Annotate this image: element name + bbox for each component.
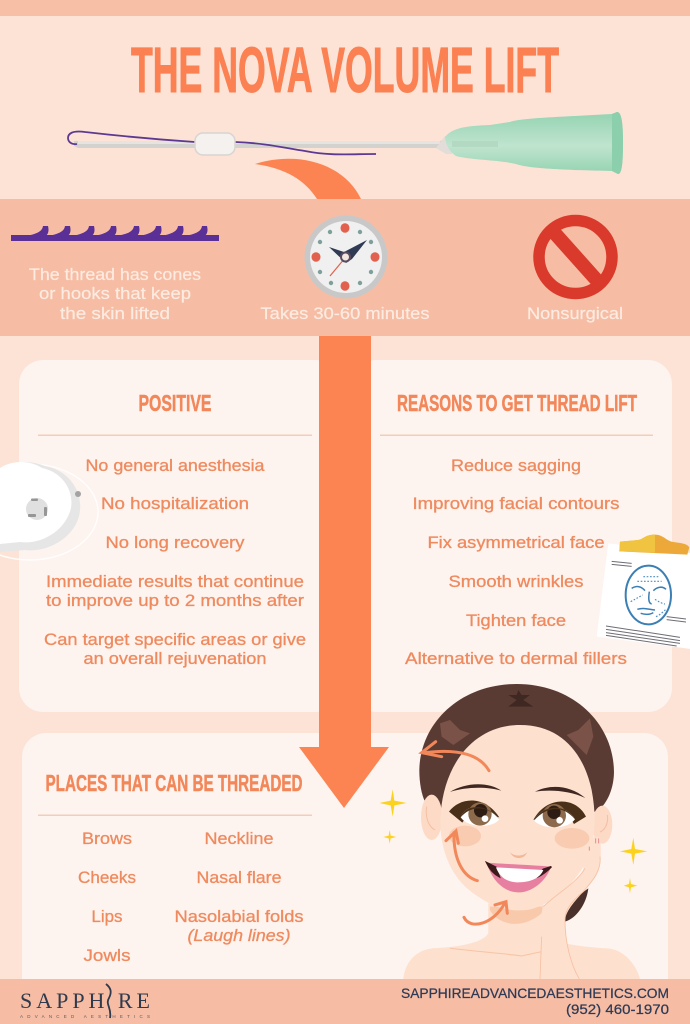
- heading: positive: POSITIVE: [138, 390, 212, 416]
- list: places column 1: Cheeks: [78, 869, 136, 887]
- text: thread description: or hooks that keep: [39, 285, 191, 303]
- list: positive benefits: [44, 457, 306, 668]
- list: positive benefits: Can target specific areas or give: [44, 631, 306, 649]
- icon: prohibition sign: [539, 220, 612, 294]
- list: places column 2: Nasal flare: [196, 869, 282, 887]
- contact details: (952) 460-1970: [566, 1001, 669, 1017]
- face: [440, 725, 595, 910]
- hair: [419, 684, 614, 813]
- list: reasons: Reduce sagging: [451, 457, 581, 475]
- list: reasons: Alternative to dermal fillers: [405, 650, 627, 668]
- arrow: curved tail top: [255, 159, 361, 199]
- list: positive benefits: Immediate results that continue: [46, 573, 304, 591]
- logo: Sapphire Advanced Aesthetics: ADVANCED AESTHETICS: [20, 1014, 150, 1019]
- nose: [510, 852, 527, 858]
- list: places column 1: Brows: [82, 830, 132, 848]
- hair bun: [563, 888, 588, 922]
- list: positive benefits: No general anesthesia: [86, 457, 265, 475]
- list: positive benefits: an overall rejuvenation: [84, 650, 266, 668]
- list: places column 2: Neckline: [204, 830, 274, 848]
- logo: Sapphire Advanced Aesthetics: SAPPH RE: [20, 988, 150, 1013]
- list: positive benefits: to improve up to 2 months after: [46, 592, 305, 610]
- eyebrows: [450, 784, 501, 792]
- list: reasons: Smooth wrinkles: [448, 573, 584, 591]
- panel: places: [22, 733, 668, 1003]
- shoulders and neck: [403, 903, 640, 979]
- list: reasons: Tighten face: [466, 612, 566, 630]
- icon: needle with thread: [68, 112, 623, 174]
- text: thread description: [29, 266, 201, 323]
- text: thread description: the skin lifted: [60, 305, 170, 323]
- left eye: [449, 800, 499, 823]
- panel: reasons: [352, 360, 672, 712]
- list: places column 2: (Laugh lines): [188, 927, 290, 945]
- list: places column 1: [78, 830, 136, 965]
- contact details: [401, 985, 669, 1017]
- list: reasons: Improving facial contours: [412, 495, 620, 513]
- heading: places: PLACES THAT CAN BE THREADED: [46, 770, 302, 796]
- icon: clock: [304, 216, 388, 298]
- illustration: smiling woman: [379, 684, 647, 979]
- text: nonsurgical: Nonsurgical: [527, 305, 623, 323]
- panel: features band: [0, 199, 690, 336]
- list: positive benefits: No long recovery: [106, 534, 245, 552]
- icon: clipboard with face chart: [597, 535, 690, 649]
- text: duration: Takes 30-60 minutes: [260, 305, 430, 323]
- contact details: SAPPHIREADVANCEDAESTHETICS.COM: [401, 985, 669, 1001]
- list: positive benefits: No hospitalization: [101, 495, 249, 513]
- list: reasons: [405, 457, 627, 668]
- lift arrows: [422, 742, 507, 924]
- hand: [540, 837, 601, 979]
- panel: positive: [19, 360, 339, 712]
- icon: barbed thread: [11, 226, 219, 241]
- sparkles: [379, 789, 647, 893]
- list: reasons: Fix asymmetrical face: [428, 534, 604, 552]
- cheeks: [449, 826, 481, 846]
- text: thread description: The thread has cones: [29, 266, 201, 284]
- mouth: [487, 863, 551, 892]
- list: places column 2: Nasolabial folds: [174, 908, 304, 926]
- list: places column 1: Jowls: [84, 947, 130, 965]
- footer band: [0, 979, 690, 1024]
- right eye: [533, 801, 586, 824]
- ears: [421, 795, 442, 840]
- icon: thread spool: [0, 462, 98, 560]
- list: places column 1: Lips: [92, 908, 122, 926]
- arrow: main down arrow: [299, 336, 389, 808]
- list: places column 2: [174, 830, 304, 945]
